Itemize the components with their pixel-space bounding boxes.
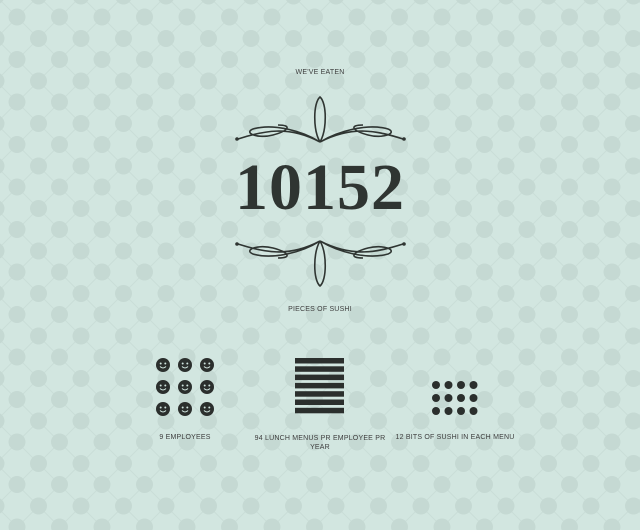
icon: lunch menu bars [295,358,344,414]
label: lunch menus: 94 LUNCH MENUS PR EMPLOYEE PR YEAR [255,435,385,451]
big number: 10152 [235,151,405,224]
subheading: pieces of sushi: PIECES OF SUSHI [288,306,352,313]
label: bits of sushi: 12 BITS OF SUSHI IN EACH MENU [396,434,514,441]
label: employees: 9 EMPLOYEES [159,434,211,441]
flourish bottom [235,240,406,287]
flourish top [235,96,406,143]
icon: employees smileys [156,358,214,416]
heading: we've eaten: WE'VE EATEN [296,69,344,76]
icon: sushi dots [432,381,478,415]
